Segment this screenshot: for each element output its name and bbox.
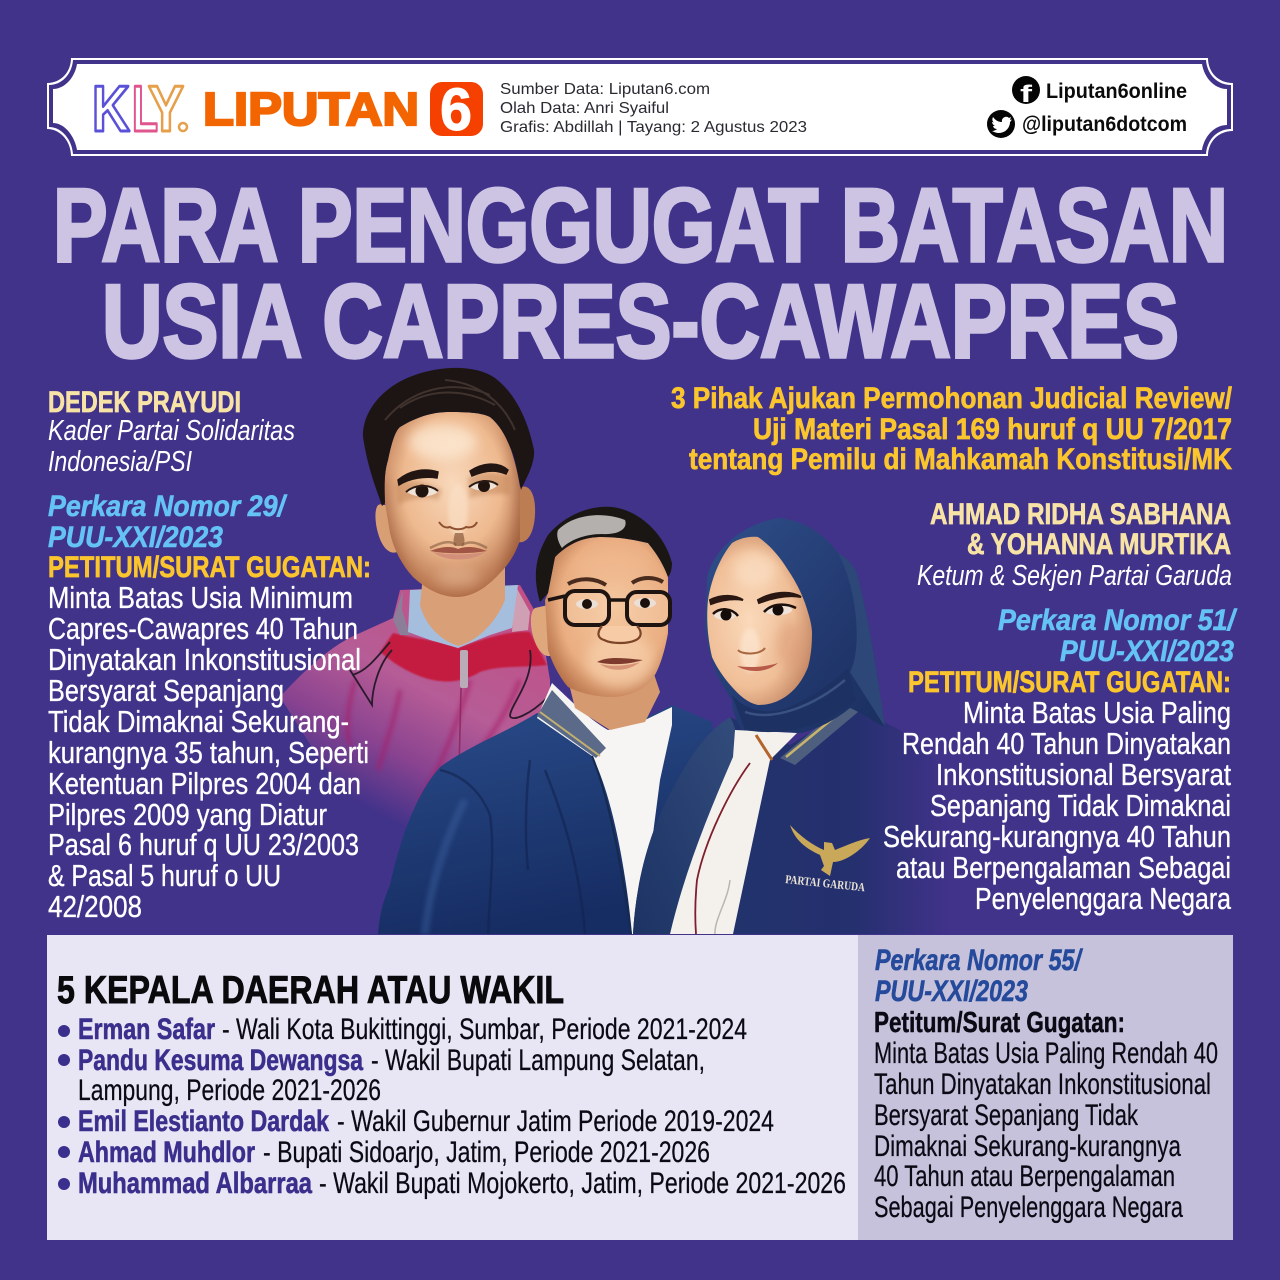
logo: KLY: L (132, 72, 158, 145)
list: Emil Elestianto Dardak: - Wakil Gubernur Jatim Periode 2019-2024 (337, 1105, 774, 1138)
list: Ahmad Muhdlor (58, 1136, 710, 1169)
logo: Partai Garuda eagle: PARTAI GARUDA (785, 872, 866, 894)
panel: perkara nomor 55: Dimaknai Sekurang-kurangnya (874, 1130, 1181, 1163)
list: Pandu Kesuma Dewangsa: Lampung, Periode 2021-2026 (78, 1074, 381, 1107)
left column: Dedek Prayudi: Tidak Dimaknai Sekurang- (48, 704, 349, 739)
panel: 5 kepala daerah (47, 935, 859, 1240)
panel: perkara nomor 55: PUU-XXI/2023 (875, 975, 1028, 1008)
list: Muhammad Albarraa: - Wakil Bupati Mojokerto, Jatim, Periode 2021-2026 (319, 1167, 846, 1200)
list: Pandu Kesuma Dewangsa (58, 1044, 705, 1107)
twitter handle: @liputan6dotcom (1022, 113, 1187, 136)
left column: Dedek Prayudi: Dinyatakan Inkonstitusional (48, 642, 361, 677)
list: Erman Safar: - Wali Kota Bukittinggi, Sumbar, Periode 2021-2024 (222, 1013, 747, 1046)
right column: judicial review heading (671, 382, 1233, 476)
list: Erman Safar: Erman Safar (78, 1013, 215, 1046)
list: Pandu Kesuma Dewangsa: Pandu Kesuma Dewangsa (78, 1044, 363, 1077)
logo: Partai Garuda eagle (785, 825, 870, 894)
list: Ahmad Muhdlor: Ahmad Muhdlor (78, 1136, 255, 1169)
panel: perkara nomor 55: Bersyarat Sepanjang Tidak (874, 1099, 1139, 1132)
portrait: Dedek Prayudi (282, 368, 550, 822)
title (53, 168, 1228, 380)
left column: Dedek Prayudi: kurangnya 35 tahun, Seperti (48, 735, 369, 770)
heading: 5 kepala daerah: 5 KEPALA DAERAH ATAU WAKIL (57, 969, 564, 1012)
logo: Liputan: LIPUTAN (203, 83, 419, 135)
left column: Dedek Prayudi: Ketentuan Pilpres 2004 dan (48, 766, 361, 801)
portrait: Ahmad Ridha Sabhana (378, 507, 720, 934)
left column: Dedek Prayudi: Perkara Nomor 29/ (48, 490, 287, 523)
portrait: Yohanna Murtika (633, 518, 950, 934)
logo: KLY (92, 72, 187, 145)
left column: Dedek Prayudi: Pilpres 2009 yang Diatur (48, 797, 327, 832)
header banner (47, 58, 1233, 156)
right column: Partai Garuda: PUU-XXI/2023 (1060, 635, 1234, 668)
left column: Dedek Prayudi: DEDEK PRAYUDI (48, 386, 241, 419)
logo: KLY: Y (148, 72, 184, 145)
panel: perkara nomor 55: 40 Tahun atau Berpengalaman (874, 1160, 1175, 1193)
left column: Dedek Prayudi: PETITUM/SURAT GUGATAN: (48, 551, 371, 584)
credits (500, 81, 807, 136)
left column: Dedek Prayudi: PUU-XXI/2023 (48, 521, 223, 554)
list: Erman Safar (58, 1013, 747, 1046)
list: Ahmad Muhdlor: - Bupati Sidoarjo, Jatim, Periode 2021-2026 (263, 1136, 710, 1169)
facebook handle: Liputan6online (1046, 80, 1187, 103)
left column: Dedek Prayudi: Capres-Cawapres 40 Tahun (48, 611, 358, 646)
left column: Dedek Prayudi: Minta Batas Usia Minimum (48, 580, 353, 615)
right column: Partai Garuda: Perkara Nomor 51/ (998, 604, 1237, 637)
panel: perkara nomor 55: Petitum/Surat Gugatan: (874, 1007, 1125, 1039)
left column: Dedek Prayudi: Pasal 6 huruf q UU 23/2003 (48, 827, 359, 862)
list: Pandu Kesuma Dewangsa: - Wakil Bupati Lampung Selatan, (371, 1044, 705, 1077)
list: Emil Elestianto Dardak: Emil Elestianto Dardak (78, 1105, 329, 1138)
left column: Dedek Prayudi: Indonesia/PSI (48, 446, 192, 478)
left column: Dedek Prayudi (48, 386, 371, 924)
logo: 6 badge: 6 (440, 76, 472, 143)
list: Muhammad Albarraa: Muhammad Albarraa (78, 1167, 312, 1200)
left column: Dedek Prayudi: Kader Partai Solidaritas (48, 415, 295, 447)
right column: Partai Garuda (883, 498, 1237, 916)
left column: Dedek Prayudi: 42/2008 (48, 889, 142, 924)
credits: Sumber Data: Liputan6.com (500, 81, 710, 98)
facebook handle: f (1020, 81, 1034, 108)
left column: Dedek Prayudi: Bersyarat Sepanjang (48, 673, 284, 708)
credits: Olah Data: Anri Syaiful (500, 100, 669, 117)
list: Muhammad Albarraa (58, 1167, 846, 1200)
credits: Grafis: Abdillah | Tayang: 2 Agustus 2023 (500, 119, 807, 136)
left column: Dedek Prayudi: & Pasal 5 huruf o UU (48, 858, 281, 893)
portraits illustration (280, 368, 950, 934)
logo: 6 badge (430, 76, 483, 143)
list: Emil Elestianto Dardak (58, 1105, 774, 1138)
twitter handle (987, 110, 1187, 138)
logo: KLY: K (92, 72, 130, 145)
facebook handle (1012, 76, 1187, 108)
panel: perkara nomor 55: Perkara Nomor 55/ (875, 944, 1083, 977)
panel: perkara nomor 55 (858, 935, 1233, 1240)
